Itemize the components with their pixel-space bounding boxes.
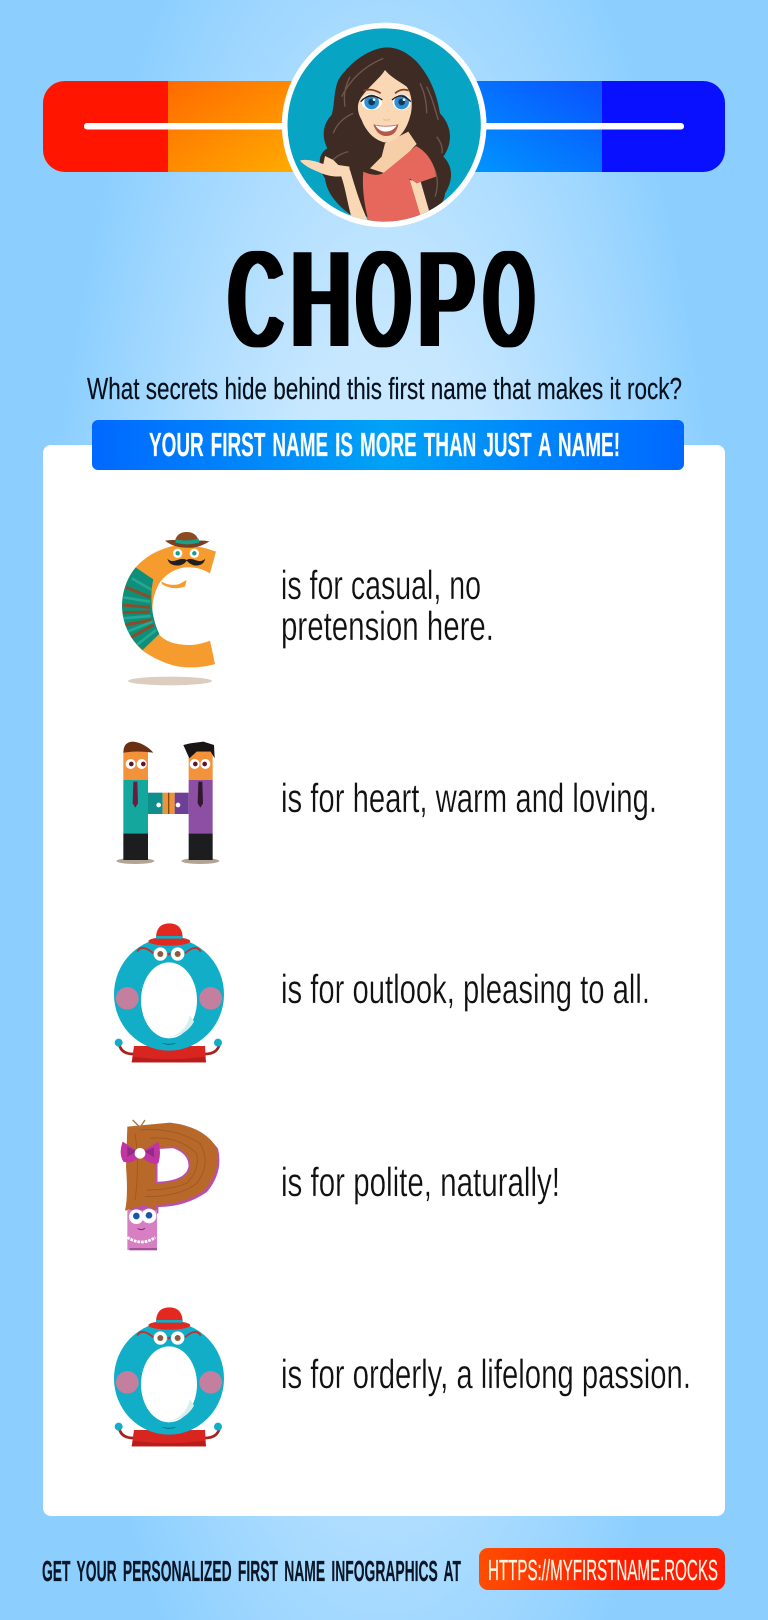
footer url button xyxy=(479,1548,725,1590)
icon: letter C character xyxy=(122,532,216,685)
title: C xyxy=(228,220,284,379)
icon: letter P character xyxy=(121,1120,219,1250)
text: O xyxy=(484,220,534,379)
title xyxy=(228,220,534,379)
avatar portrait xyxy=(282,23,486,227)
header colour bar xyxy=(43,81,725,172)
title: P xyxy=(418,220,475,379)
text: P line: is for polite, naturally! xyxy=(281,1159,560,1205)
text: C line: is for casual, no xyxy=(281,562,481,608)
icon: letter H character xyxy=(116,742,219,864)
title: O xyxy=(356,220,411,379)
title: H xyxy=(291,220,351,379)
text: C line two: pretension here. xyxy=(281,603,494,649)
icon: second letter O character xyxy=(114,1307,224,1446)
white content card xyxy=(43,445,725,1516)
icon: letter O character xyxy=(114,923,224,1062)
banner xyxy=(92,420,684,470)
